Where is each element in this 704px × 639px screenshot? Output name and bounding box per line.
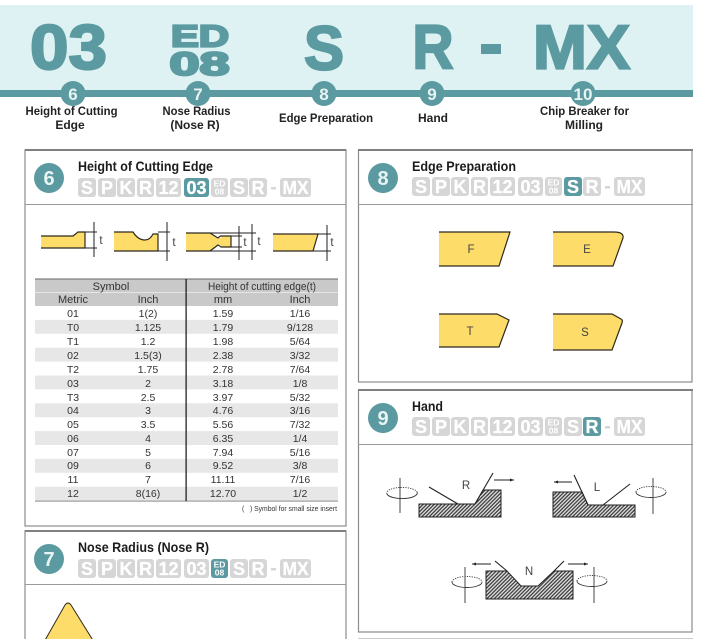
- label: nose radius: (Nose R): [170, 118, 220, 132]
- table: height of cutting edge: 1/2: [293, 488, 307, 500]
- number badge 9: 9: [377, 408, 389, 430]
- table: height of cutting edge: 7.94: [213, 447, 233, 459]
- insert edge S: S: [581, 327, 589, 339]
- table: height of cutting edge: 1.5(3): [134, 350, 162, 362]
- code strip: 03: [520, 177, 540, 197]
- code strip: MX: [282, 559, 308, 579]
- table: height of cutting edge: 7/16: [290, 474, 310, 486]
- code strip: R: [586, 177, 598, 197]
- code strip: S: [81, 559, 93, 579]
- table: height of cutting edge: 1/4: [293, 433, 307, 445]
- table: height of cutting edge: 2.5: [141, 392, 155, 404]
- table: height of cutting edge: [35, 278, 338, 502]
- code strip: MX: [282, 178, 308, 198]
- table: height of cutting edge: 2.38: [213, 350, 233, 362]
- code strip: P: [435, 417, 447, 437]
- code: R: R: [412, 14, 454, 82]
- code strip: R: [252, 559, 264, 579]
- table: height of cutting edge: Symbol: [93, 281, 129, 293]
- table: height of cutting edge: 07: [67, 447, 79, 459]
- table: height of cutting edge: 3/8: [293, 460, 307, 472]
- label: chip breaker: Chip Breaker for: [540, 104, 629, 118]
- code strip: 12: [492, 417, 512, 437]
- code strip: R: [139, 178, 152, 198]
- code: ED 08: ED: [171, 18, 229, 54]
- table: height of cutting edge: 6: [145, 460, 151, 472]
- table: height of cutting edge: T3: [67, 392, 79, 404]
- diagram: edge height 2: [114, 222, 176, 261]
- code strip: 08: [215, 186, 224, 196]
- table: height of cutting edge: 06: [67, 433, 79, 445]
- code strip: [78, 559, 311, 579]
- table footnote: ( ) Symbol for small size insert: [242, 504, 338, 513]
- label: edge preparation: Edge Preparation: [279, 111, 373, 125]
- code strip: P: [435, 177, 447, 197]
- code strip: 03: [186, 178, 206, 198]
- table: height of cutting edge: 7/64: [290, 364, 310, 376]
- code strip: 08: [549, 186, 558, 196]
- code: ED 08: [170, 18, 230, 82]
- code strip: 08: [215, 568, 224, 578]
- label: height of cutting edge: Height of Cutting: [26, 104, 118, 118]
- label: nose radius: [162, 104, 231, 132]
- insert edge E: E: [583, 244, 591, 256]
- insert edge F: F: [467, 244, 475, 256]
- diagram: left hand: L: [594, 482, 601, 494]
- table: height of cutting edge: 12.70: [210, 488, 236, 500]
- code strip: 03: [520, 417, 540, 437]
- marker 8: 8: [319, 85, 329, 104]
- table: height of cutting edge: 3.5: [141, 419, 155, 431]
- code strip: [412, 177, 645, 197]
- code strip: S: [415, 417, 427, 437]
- panel: edge preparation: [358, 149, 693, 382]
- next panel top edge: [358, 638, 693, 639]
- code strip: MX: [616, 177, 642, 197]
- marker 10: [570, 81, 596, 106]
- code: S: S: [304, 14, 344, 84]
- marker 9: 9: [427, 85, 437, 104]
- table: height of cutting edge: 5/32: [290, 392, 310, 404]
- marker 7: [186, 81, 210, 106]
- marker 10: 10: [574, 85, 592, 104]
- heading: Nose Radius (Nose R): [78, 539, 209, 555]
- code: MX: MX: [533, 14, 630, 82]
- diagram: edge height 3: t: [257, 236, 261, 248]
- table: height of cutting edge: 8(16): [136, 488, 160, 500]
- table: height of cutting edge: 3.97: [213, 392, 233, 404]
- label: chip breaker: Milling: [565, 118, 603, 132]
- code strip: ED: [548, 418, 559, 428]
- insert edge F: [439, 232, 510, 266]
- table: height of cutting edge: 2.78: [213, 364, 233, 376]
- icon: triangular insert: [44, 603, 94, 639]
- code strip: 08: [549, 426, 558, 436]
- code strip: S: [233, 559, 245, 579]
- code: dash: [481, 44, 501, 54]
- code strip: K: [120, 178, 132, 198]
- diagram: right hand: [387, 473, 514, 517]
- table: height of cutting edge: 11: [68, 474, 79, 486]
- table: height of cutting edge: 7/32: [290, 419, 310, 431]
- diagram: edge height 1: t: [99, 235, 103, 247]
- code strip: ED: [214, 560, 225, 570]
- heading: Edge Preparation: [412, 158, 516, 174]
- panel: nose radius: [25, 530, 346, 639]
- table: height of cutting edge: 7: [145, 474, 151, 486]
- table: height of cutting edge: 5/16: [290, 447, 310, 459]
- marker 6: [60, 81, 86, 106]
- heading: Hand: [412, 398, 443, 414]
- code strip: K: [120, 559, 132, 579]
- diagram: left hand: [553, 475, 666, 517]
- table: height of cutting edge: 4.76: [213, 405, 233, 417]
- table: height of cutting edge: 04: [67, 405, 79, 417]
- table: height of cutting edge: 01: [67, 308, 79, 320]
- table: height of cutting edge: Metric: [58, 294, 88, 306]
- label: hand: Hand: [418, 111, 448, 125]
- table: height of cutting edge: 1.79: [213, 322, 233, 334]
- table: height of cutting edge: 3: [145, 405, 151, 417]
- table: height of cutting edge: 1(2): [139, 308, 157, 320]
- code strip: S: [81, 178, 93, 198]
- code strip: S: [567, 177, 579, 197]
- diagram: edge height 4: t: [330, 237, 334, 249]
- table: height of cutting edge: T2: [67, 364, 79, 376]
- table: height of cutting edge: 2: [145, 378, 151, 390]
- insert edge T: T: [466, 326, 474, 338]
- number badge 7: 7: [43, 549, 55, 571]
- code strip: R: [252, 178, 264, 198]
- diagram: edge height 3: [186, 224, 261, 260]
- table: height of cutting edge: 12: [67, 488, 79, 500]
- code strip: 03: [186, 559, 206, 579]
- number badge 6: [34, 163, 64, 193]
- code strip: P: [101, 559, 113, 579]
- table: height of cutting edge: 9.52: [213, 460, 233, 472]
- code strip: S: [415, 177, 427, 197]
- table: height of cutting edge: 03: [67, 378, 79, 390]
- table: height of cutting edge: Inch: [138, 294, 158, 306]
- diagram: edge height 4: [273, 225, 334, 261]
- table: height of cutting edge: 5: [145, 447, 151, 459]
- code strip: R: [139, 559, 152, 579]
- diagram: edge height 2: t: [172, 237, 176, 249]
- table: height of cutting edge: 1.125: [135, 322, 161, 334]
- insert edge S: [553, 314, 622, 350]
- table: height of cutting edge: 1/16: [290, 308, 310, 320]
- insert edge E: [553, 232, 623, 266]
- diagram: right hand: R: [462, 480, 470, 492]
- table: height of cutting edge: 11.11: [211, 474, 236, 486]
- code strip: R: [473, 177, 486, 197]
- table: height of cutting edge: mm: [214, 294, 232, 306]
- number badge 7: [34, 544, 64, 574]
- table: height of cutting edge: 1.59: [213, 308, 233, 320]
- table: height of cutting edge: 5.56: [213, 419, 233, 431]
- label: height of cutting edge: [26, 104, 118, 132]
- table: height of cutting edge: 6.35: [213, 433, 233, 445]
- number badge 9: [368, 403, 398, 433]
- number badge 8: [368, 163, 398, 193]
- table: height of cutting edge: Inch: [290, 294, 310, 306]
- table: height of cutting edge: 3/32: [290, 350, 310, 362]
- diagram: neutral hand: [452, 561, 607, 603]
- marker 9: [420, 81, 444, 106]
- table: height of cutting edge: 05: [67, 419, 79, 431]
- code strip: R: [473, 417, 486, 437]
- table: height of cutting edge: 1/8: [293, 378, 307, 390]
- code strip: ED: [214, 178, 225, 188]
- marker 6: 6: [68, 85, 78, 104]
- table: height of cutting edge: Height of cutting edge(t): [208, 281, 316, 293]
- code strip: ED: [548, 178, 559, 188]
- code: ED 08: 08: [170, 46, 230, 82]
- diagram: edge height 1: [41, 222, 103, 257]
- table: height of cutting edge: 02: [67, 350, 79, 362]
- table: height of cutting edge: 4: [145, 433, 151, 445]
- marker 8: [312, 81, 336, 106]
- number badge 6: 6: [43, 168, 55, 190]
- header band: [0, 5, 693, 106]
- code strip: 12: [158, 559, 178, 579]
- code strip: 12: [492, 177, 512, 197]
- table: height of cutting edge: 1.98: [213, 336, 233, 348]
- table: height of cutting edge: 3/16: [290, 405, 310, 417]
- insert edge T: [439, 314, 509, 347]
- label: nose radius: Nose Radius: [162, 104, 231, 118]
- code strip: [78, 178, 311, 198]
- code: 03: 03: [30, 13, 107, 83]
- table: height of cutting edge: T1: [67, 336, 79, 348]
- diagram: edge height 3: t: [243, 237, 247, 249]
- table: height of cutting edge: 5/64: [290, 336, 310, 348]
- table: height of cutting edge: 3.18: [213, 378, 233, 390]
- number badge 8: 8: [377, 168, 389, 190]
- table: height of cutting edge: 9/128: [287, 322, 313, 334]
- code strip: MX: [616, 417, 642, 437]
- label: height of cutting edge: Edge: [55, 118, 85, 132]
- table: height of cutting edge: 1.2: [141, 336, 155, 348]
- diagram: neutral hand: N: [525, 566, 533, 578]
- label: chip breaker: [540, 104, 629, 132]
- code strip: [412, 417, 645, 437]
- table: height of cutting edge: 1.75: [138, 364, 158, 376]
- code strip: K: [454, 177, 466, 197]
- table: height of cutting edge: T0: [67, 322, 79, 334]
- marker 7: 7: [193, 85, 203, 104]
- panel: height of cutting edge: [25, 149, 346, 526]
- table: height of cutting edge: 09: [67, 460, 79, 472]
- code strip: K: [454, 417, 466, 437]
- code strip: R: [586, 417, 598, 437]
- panel: hand: [358, 389, 693, 632]
- code strip: S: [567, 417, 579, 437]
- code strip: S: [233, 178, 245, 198]
- code strip: P: [101, 178, 113, 198]
- heading: Height of Cutting Edge: [78, 158, 213, 174]
- code strip: 12: [158, 178, 178, 198]
